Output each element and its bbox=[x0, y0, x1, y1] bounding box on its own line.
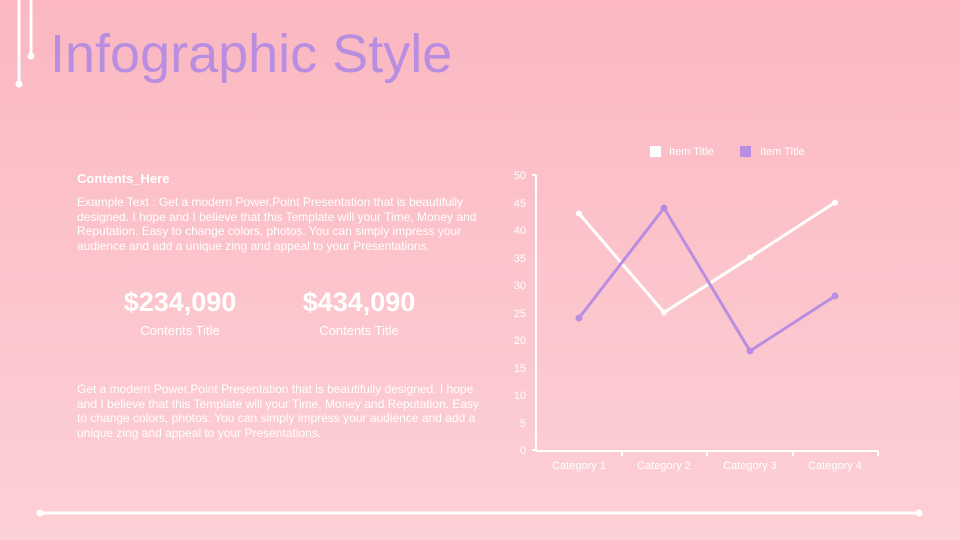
stat 2 bbox=[303, 287, 415, 338]
y labels: 10 bbox=[514, 390, 526, 402]
stat 2: $434,090 bbox=[303, 287, 415, 317]
y labels: 15 bbox=[514, 363, 526, 375]
axes bbox=[532, 175, 878, 456]
title: Infographic Style bbox=[50, 24, 452, 84]
y labels: 45 bbox=[514, 198, 526, 210]
legend: Item Title bbox=[760, 146, 805, 158]
stat 1: $234,090 bbox=[124, 287, 236, 317]
x labels bbox=[552, 460, 862, 472]
x labels: Category 4 bbox=[808, 460, 862, 472]
y labels: 50 bbox=[514, 170, 526, 182]
text block: body: Get a modern Power.Point Presentation that is beautifully designed. I hope and I believe that this Template will your Time, Money and Reputation. Easy to change colors, photos. You can simply impress your audience and add a unique zing and appeal to your Presentations. bbox=[77, 382, 479, 440]
legend bbox=[650, 146, 805, 158]
series white bbox=[576, 200, 838, 316]
x labels: Category 2 bbox=[637, 460, 691, 472]
series purple bbox=[576, 204, 838, 354]
y labels: 35 bbox=[514, 253, 526, 265]
y labels: 25 bbox=[514, 308, 526, 320]
legend: Item Title bbox=[669, 146, 714, 158]
y labels: 20 bbox=[514, 335, 526, 347]
y labels bbox=[514, 170, 526, 457]
text block: example text: Example Text : Get a modern Power.Point Presentation that is beautifully designed. I hope and I believe that this Template will your Time, Money and Reputation. Easy to change colors, photos. You can simply impress your audience and add a unique zing and appeal to your Presentations. bbox=[77, 195, 476, 252]
stat 2: Contents Title bbox=[319, 323, 399, 338]
x labels: Category 3 bbox=[723, 460, 777, 472]
y labels: 5 bbox=[520, 418, 526, 430]
heading: contents: Contents_Here bbox=[77, 171, 169, 186]
stat 1 bbox=[124, 287, 236, 338]
stat 1: Contents Title bbox=[140, 323, 220, 338]
y labels: 40 bbox=[514, 225, 526, 237]
y labels: 0 bbox=[520, 445, 526, 457]
y labels: 30 bbox=[514, 280, 526, 292]
x labels: Category 1 bbox=[552, 460, 606, 472]
